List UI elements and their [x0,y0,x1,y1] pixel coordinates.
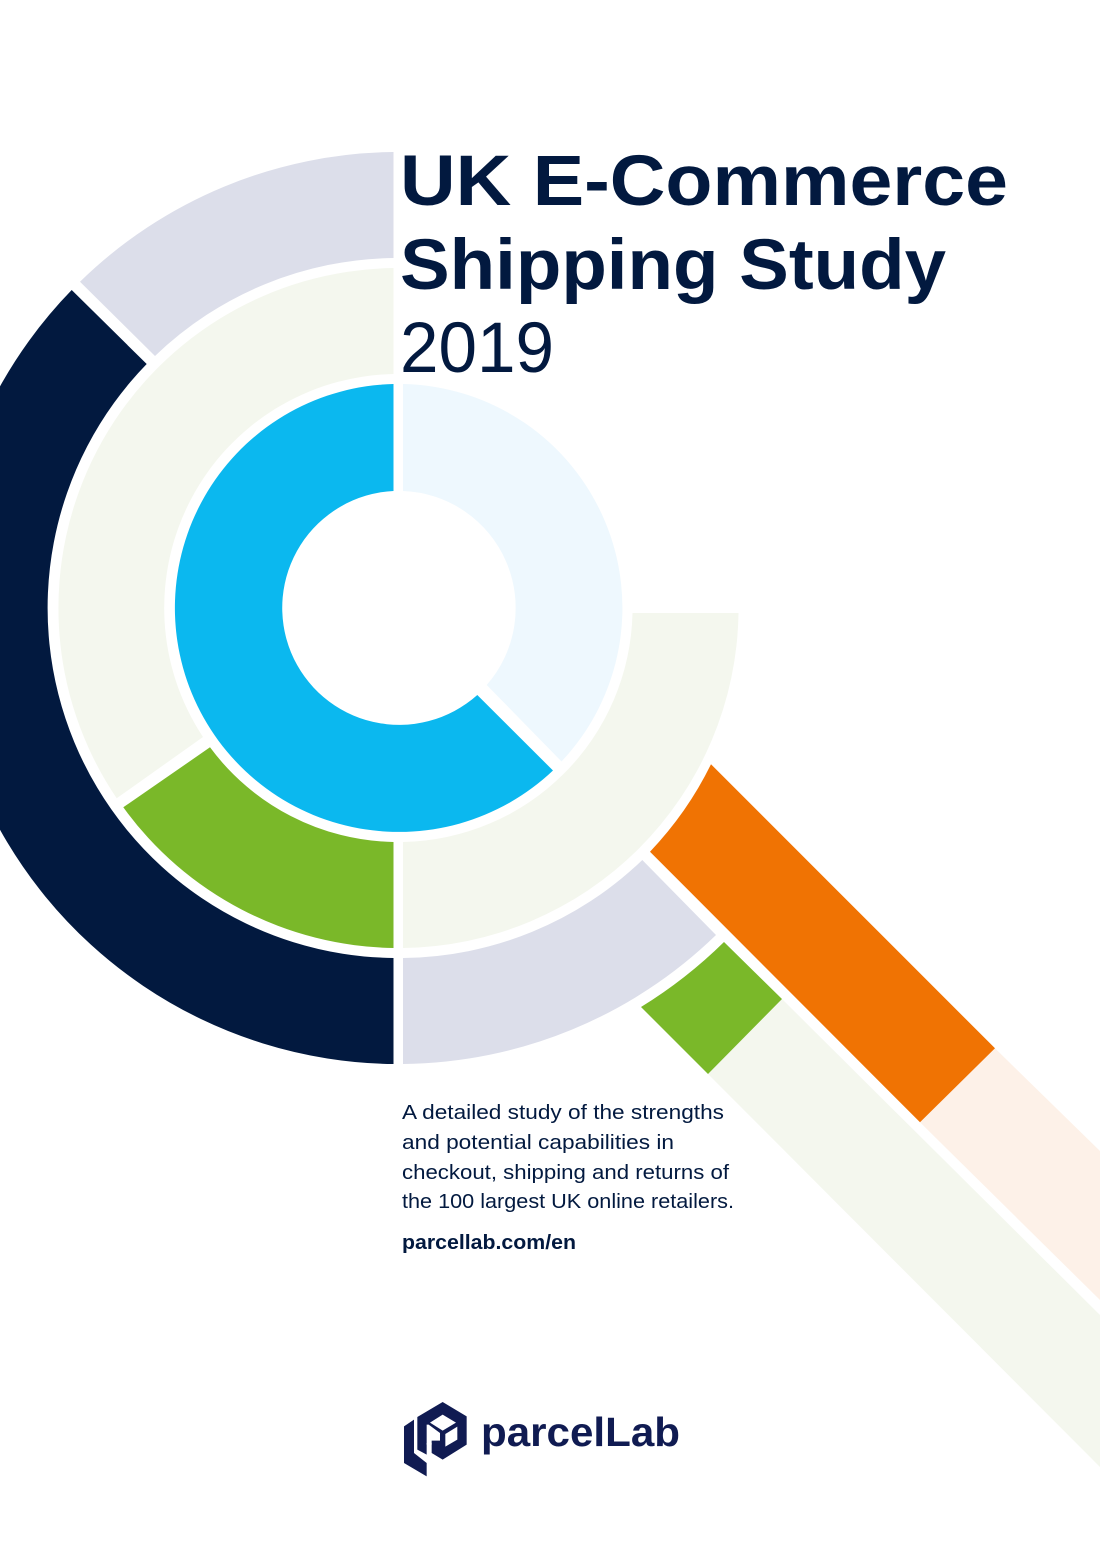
description line 3: checkout, shipping and returns of [402,1161,729,1184]
middle ring: pale green left segment [58,268,394,798]
handle: pale green band [708,999,1100,1467]
parcelLab logo [404,1402,680,1476]
website link: parcellab.com/en [402,1231,576,1254]
handle: green band [641,942,782,1074]
handle: orange band [650,764,995,1122]
description line 2: and potential capabilities in [402,1131,674,1154]
middle ring: green segment [123,747,394,948]
title line 1: UK E-Commerce [400,142,1008,221]
outer ring: lavender bottom segment [403,860,716,1064]
inner ring: blue segment [175,384,553,832]
description line 4: the 100 largest UK online retailers. [402,1190,734,1213]
outer ring: navy segment [0,290,394,1064]
inner ring: pale blue segment [403,384,622,762]
logo wordmark: parcelLab [481,1409,680,1455]
outer ring: lavender top segment [80,152,394,356]
handle: pale orange band [920,1048,1100,1300]
title [400,142,1008,388]
title line 2: Shipping Study [400,226,947,305]
title year: 2019 [400,309,554,388]
description line 1: A detailed study of the strengths [402,1101,724,1124]
logo icon [404,1402,467,1476]
middle ring: pale green right segment [403,613,738,948]
description text [402,1101,734,1213]
